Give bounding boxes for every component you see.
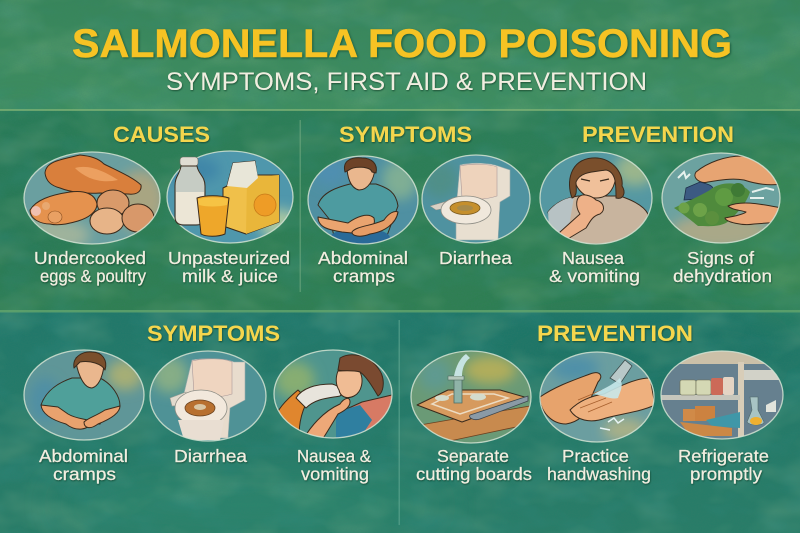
- illustration: refrigerate promptly: [660, 350, 785, 440]
- panel: causes: [10, 122, 300, 286]
- label: undercooked eggs and poultry: eggs & poultry: [40, 266, 146, 286]
- illustration: signs of dehydration: [660, 150, 782, 250]
- label: separate cutting boards: Separate: [437, 446, 509, 466]
- heading: prevention: PREVENTION: [537, 321, 693, 346]
- label: abdominal cramps: Abdominal: [318, 248, 408, 268]
- illustration: diarrhea toilet: [148, 349, 268, 443]
- label: unpasteurized milk and juice: [168, 248, 290, 286]
- label: separate cutting boards: [416, 446, 532, 484]
- label: undercooked eggs and poultry: [34, 248, 146, 286]
- heading: symptoms: SYMPTOMS: [339, 122, 472, 147]
- illustration: undercooked eggs and poultry: [23, 151, 161, 245]
- illustration: diarrhea toilet: [420, 153, 532, 245]
- heading: prevention: PREVENTION: [582, 122, 734, 147]
- title: SALMONELLA FOOD POISONING: [72, 22, 732, 66]
- label: diarrhea: Diarrhea: [439, 248, 512, 268]
- label: nausea and vomiting: Nausea &: [297, 446, 371, 466]
- panel: symptoms top: [305, 122, 532, 286]
- label: signs of dehydration: [673, 248, 772, 286]
- label: nausea and vomiting: & vomiting: [549, 266, 640, 286]
- label: undercooked eggs and poultry: Undercooked: [34, 248, 146, 268]
- label: abdominal cramps: [39, 446, 128, 484]
- illustration: nausea and vomiting: [538, 150, 655, 246]
- label: practice handwashing: Practice: [562, 446, 629, 466]
- panel: prevention top: [538, 122, 782, 286]
- label: practice handwashing: [547, 446, 651, 484]
- label: nausea and vomiting: Nausea: [562, 248, 624, 268]
- label: separate cutting boards: cutting boards: [416, 464, 532, 484]
- label: refrigerate promptly: [678, 446, 769, 484]
- illustration: abdominal cramps: [22, 349, 146, 441]
- subtitle: SYMPTOMS, FIRST AID & PREVENTION: [166, 68, 647, 96]
- label: nausea and vomiting: vomiting: [301, 464, 369, 484]
- label: refrigerate promptly: promptly: [690, 464, 762, 484]
- illustration: unpasteurized milk and juice: [166, 150, 294, 244]
- heading: symptoms: SYMPTOMS: [147, 321, 280, 346]
- illustration: practice handwashing: [538, 350, 656, 444]
- label: nausea and vomiting: [549, 248, 640, 286]
- illustration: separate cutting boards: [410, 349, 534, 445]
- illustration: nausea and vomiting: [272, 349, 394, 441]
- label: abdominal cramps: Abdominal: [39, 446, 128, 466]
- label: unpasteurized milk and juice: Unpasteurized: [168, 248, 290, 268]
- heading: causes: CAUSES: [113, 122, 210, 147]
- panel: prevention bottom: [410, 321, 785, 484]
- label: refrigerate promptly: Refrigerate: [678, 446, 769, 466]
- panel: symptoms bottom: [22, 321, 394, 484]
- label: abdominal cramps: cramps: [333, 266, 395, 286]
- label: nausea and vomiting: [297, 446, 371, 484]
- label: signs of dehydration: Signs of: [687, 248, 754, 268]
- label: signs of dehydration: dehydration: [673, 266, 772, 286]
- label: unpasteurized milk and juice: milk & juice: [182, 266, 278, 286]
- label: abdominal cramps: cramps: [53, 464, 116, 484]
- illustration: abdominal cramps: [305, 154, 421, 248]
- label: diarrhea: Diarrhea: [174, 446, 247, 466]
- label: abdominal cramps: [318, 248, 408, 286]
- label: practice handwashing: handwashing: [547, 464, 651, 484]
